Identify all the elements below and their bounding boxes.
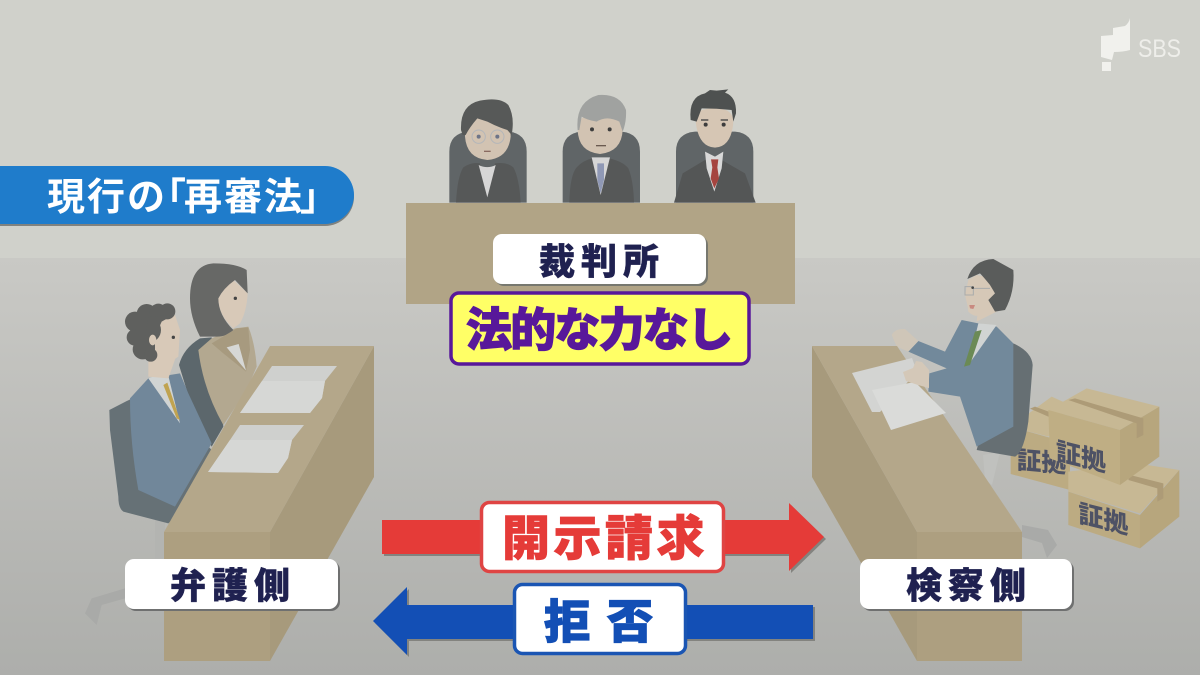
papers: defense desk upper: [240, 366, 337, 413]
figure: prosecutor: [892, 259, 1014, 447]
panel: evidence boxes: [1011, 388, 1179, 548]
papers: defense desk lower: [208, 425, 304, 473]
figure: male lawyer: [109, 303, 212, 523]
background wall: [0, 0, 1200, 258]
label: disclosure request: [482, 502, 724, 572]
panel: prosecutor desk: [812, 346, 1022, 661]
label: prosecution: [860, 559, 1074, 611]
banner: current retrial law: 現行の「再審法」: [47, 177, 338, 219]
hair: curly: [125, 303, 175, 362]
papers: prosecutor desk: [852, 358, 946, 430]
arrow: refusal: [373, 584, 815, 657]
box: back left: 証拠: [1017, 446, 1066, 479]
box: top front: 証拠: [1056, 438, 1106, 478]
chair and legs: defense: [85, 520, 165, 625]
panel: judges: [449, 89, 756, 203]
callout: no legal force: [451, 293, 749, 364]
label: refusal: 拒否: [544, 596, 670, 648]
background floor: [0, 258, 1200, 675]
chair: prosecutor: [977, 343, 1033, 457]
label: disclosure request: 開示請求: [502, 513, 708, 566]
figure: female judge: [449, 99, 527, 203]
logo: SBS: SBS: [1138, 35, 1181, 63]
box: lower right: 証拠: [1078, 500, 1128, 540]
panel: defense desk: [164, 346, 374, 661]
label: prosecution: 検察側: [906, 565, 1032, 606]
panel: prosecutor side: [892, 259, 1033, 457]
callout: no legal force: 法的な力なし: [466, 304, 731, 356]
label: defense: 弁護側: [170, 565, 296, 606]
label: court: 裁判所: [539, 241, 665, 282]
figure: younger judge: [674, 89, 756, 203]
figure: female lawyer: [179, 263, 257, 447]
logo: SBS: [1101, 18, 1181, 71]
banner: current retrial law: [0, 166, 354, 226]
label: defense: [125, 559, 340, 611]
box: top front: [1048, 388, 1159, 485]
arrow: disclosure request: [382, 502, 826, 573]
box: back left: [1011, 397, 1070, 490]
judges' bench: [406, 203, 795, 304]
panel: prosecutor legs: [983, 452, 1057, 558]
figure: senior judge: [563, 95, 640, 203]
box: lower right: [1068, 463, 1179, 548]
label: refusal: [514, 584, 686, 654]
panel: defense side: [85, 263, 257, 625]
label: court: [493, 234, 708, 286]
hand: prosecutor lower hand: [903, 361, 929, 388]
